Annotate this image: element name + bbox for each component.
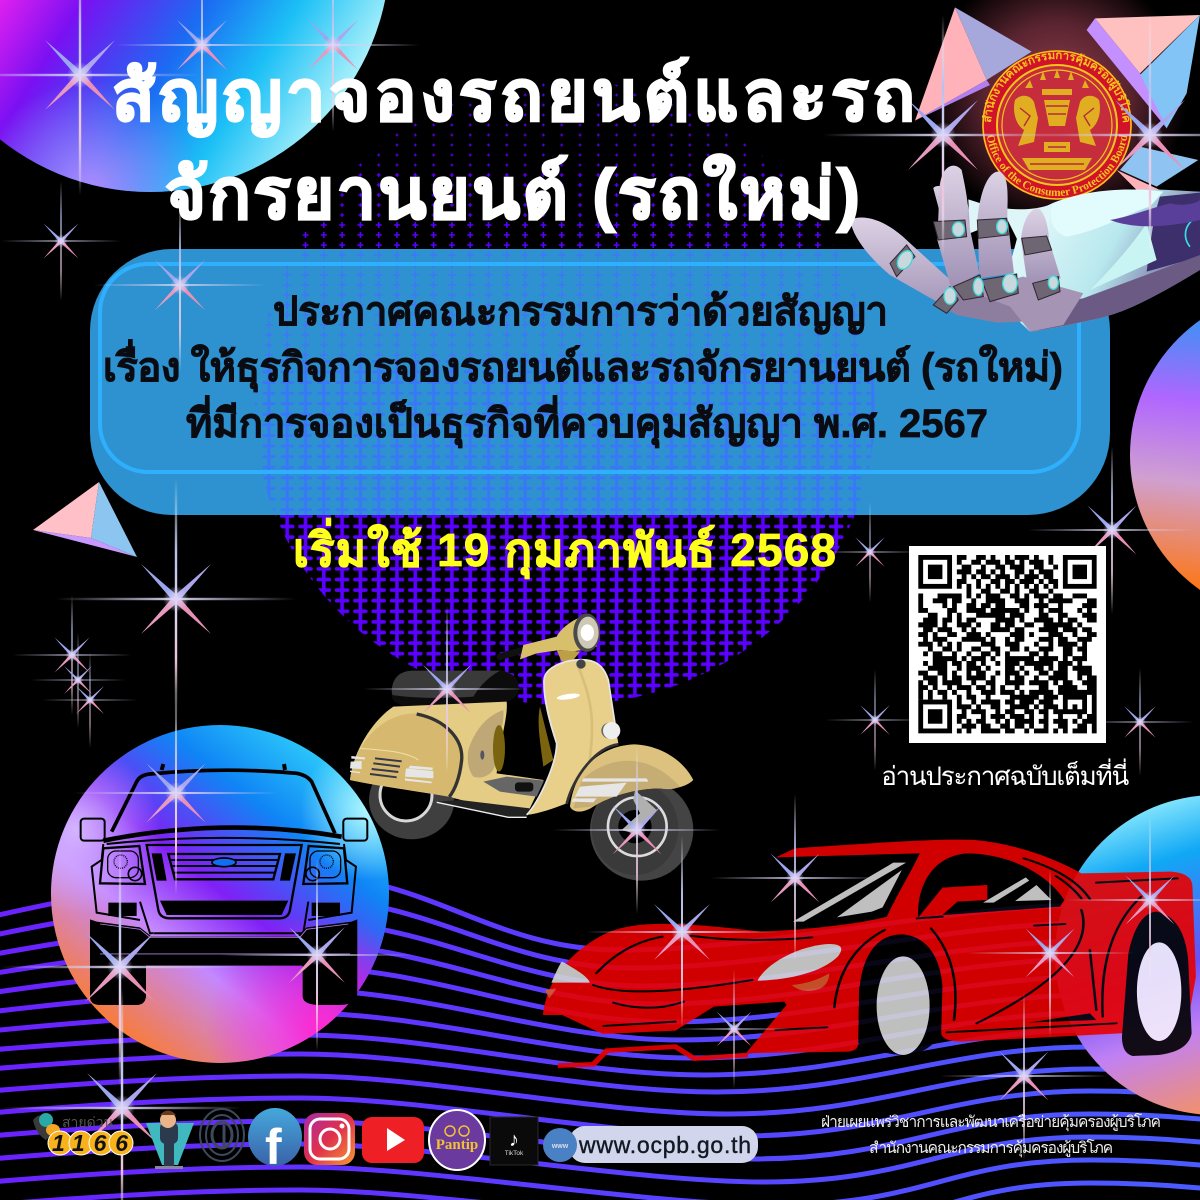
sphere: right	[1130, 290, 1200, 620]
panel text: announcement name: ที่มีการจองเป็นธุรกิจที่ควบคุมสัญญา พ.ศ. 2567	[186, 395, 988, 449]
pyramids: top right	[915, 7, 1200, 197]
seal: Office of the Consumer Protection Board: Office of the Consumer Protection Board	[987, 134, 1128, 196]
website pill	[543, 1126, 758, 1163]
wave lines	[0, 875, 1200, 1200]
seal: Office of the Consumer Protection Board: สำนักงานคณะกรรมการคุ้มครองผู้บริโภค	[982, 52, 1131, 122]
panel text: announcement name: ประกาศคณะกรรมการว่าด้วยสัญญา	[273, 290, 888, 335]
website pill: www	[551, 1143, 569, 1150]
truck front line art	[81, 764, 367, 1005]
icon: hotline 1166: สายด่วน	[62, 1114, 114, 1130]
glow behind seal	[927, 0, 1187, 225]
icon: hotline 1166	[33, 1113, 133, 1156]
icon: hotline 1166: 1166	[52, 1130, 128, 1156]
department credit text	[821, 1113, 1161, 1158]
red sports car	[543, 840, 1196, 1066]
effective date: เริ่มใช้ 19 กุมภาพันธ์ 2568	[293, 518, 836, 579]
title	[112, 57, 915, 233]
icon: youtube	[362, 1117, 424, 1163]
icon: Pantip	[429, 1110, 485, 1170]
panel: announcement box	[90, 249, 1110, 515]
icon: TikTok: ♪	[509, 1129, 519, 1151]
icon: instagram	[304, 1113, 355, 1165]
department credit text: สำนักงานคณะกรรมการคุ้มครองผู้บริโภค	[869, 1139, 1113, 1158]
sphere: truck backdrop	[51, 725, 389, 1063]
panel text: announcement name	[103, 290, 1063, 449]
sphere: top left	[0, 0, 390, 192]
QR code	[909, 546, 1106, 743]
scooter	[350, 613, 693, 881]
robot hand	[850, 166, 1200, 332]
halftone cross pattern	[275, 84, 855, 704]
sphere: bottom right	[1055, 795, 1200, 1115]
icon: TikTok	[490, 1117, 538, 1165]
website pill: www.ocpb.go.th	[578, 1132, 751, 1158]
QR caption: อ่านประกาศฉบับเต็มที่นี่	[881, 758, 1129, 791]
icon: facebook	[248, 1108, 302, 1175]
icon: facebook: f	[265, 1119, 282, 1175]
department credit text: ฝ่ายเผยแพร่วิชาการและพัฒนาเครือข่ายคุ้มครองผู้บริโภค	[821, 1113, 1161, 1132]
icon: Pantip: Pantip	[436, 1137, 478, 1153]
seal: Office of the Consumer Protection Board	[982, 50, 1132, 200]
pyramid: left	[33, 482, 137, 557]
panel text: announcement name: เรื่อง ให้ธุรกิจการจองรถยนต์และรถจักรยานยนต์ (รถใหม่)	[103, 339, 1063, 393]
icon: OCPB rings logo	[200, 1109, 244, 1161]
icon: cartoon person	[146, 1110, 194, 1169]
icon: TikTok: TikTok	[505, 1150, 524, 1157]
title: จักรยานยนต์ (รถใหม่)	[165, 153, 860, 233]
title: สัญญาจองรถยนต์และรถ	[112, 57, 915, 138]
